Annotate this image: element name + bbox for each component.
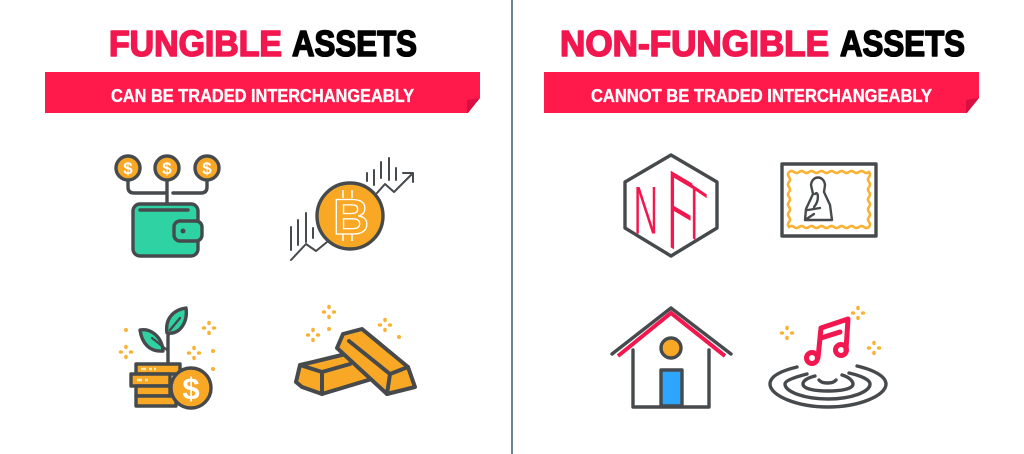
icon: NFT hexagon: T xyxy=(681,164,707,265)
icon: gold bars xyxy=(296,305,415,394)
right title: NON-FUNGIBLE xyxy=(560,23,829,64)
icon: house xyxy=(612,308,731,407)
icon: wallet with coins xyxy=(116,156,219,256)
icon: bitcoin chart: B xyxy=(333,189,369,245)
icon: coins with plant: $ xyxy=(182,371,200,406)
icon: coins with plant xyxy=(119,308,216,408)
icon: wallet with coins: $ xyxy=(123,159,133,178)
icon: NFT hexagon: N xyxy=(632,177,661,249)
left title: FUNGIBLE xyxy=(109,23,282,64)
left banner: CAN BE TRADED INTERCHANGEABLY xyxy=(111,86,414,106)
left title: ASSETS xyxy=(292,23,417,64)
right title xyxy=(560,23,965,64)
left banner xyxy=(45,72,480,113)
icon: bitcoin chart xyxy=(291,158,413,260)
icon: framed painting xyxy=(782,164,876,236)
center divider xyxy=(511,0,513,454)
icon: wallet with coins: $ xyxy=(202,159,212,178)
left title xyxy=(109,23,417,64)
icon: NFT hexagon: F xyxy=(664,146,697,287)
right banner: CANNOT BE TRADED INTERCHANGEABLY xyxy=(591,86,932,106)
icon: music note with ripples xyxy=(770,306,886,407)
icon: NFT hexagon xyxy=(625,146,717,287)
icon: wallet with coins: $ xyxy=(162,159,172,178)
right banner xyxy=(544,72,979,113)
right title: ASSETS xyxy=(840,23,965,64)
